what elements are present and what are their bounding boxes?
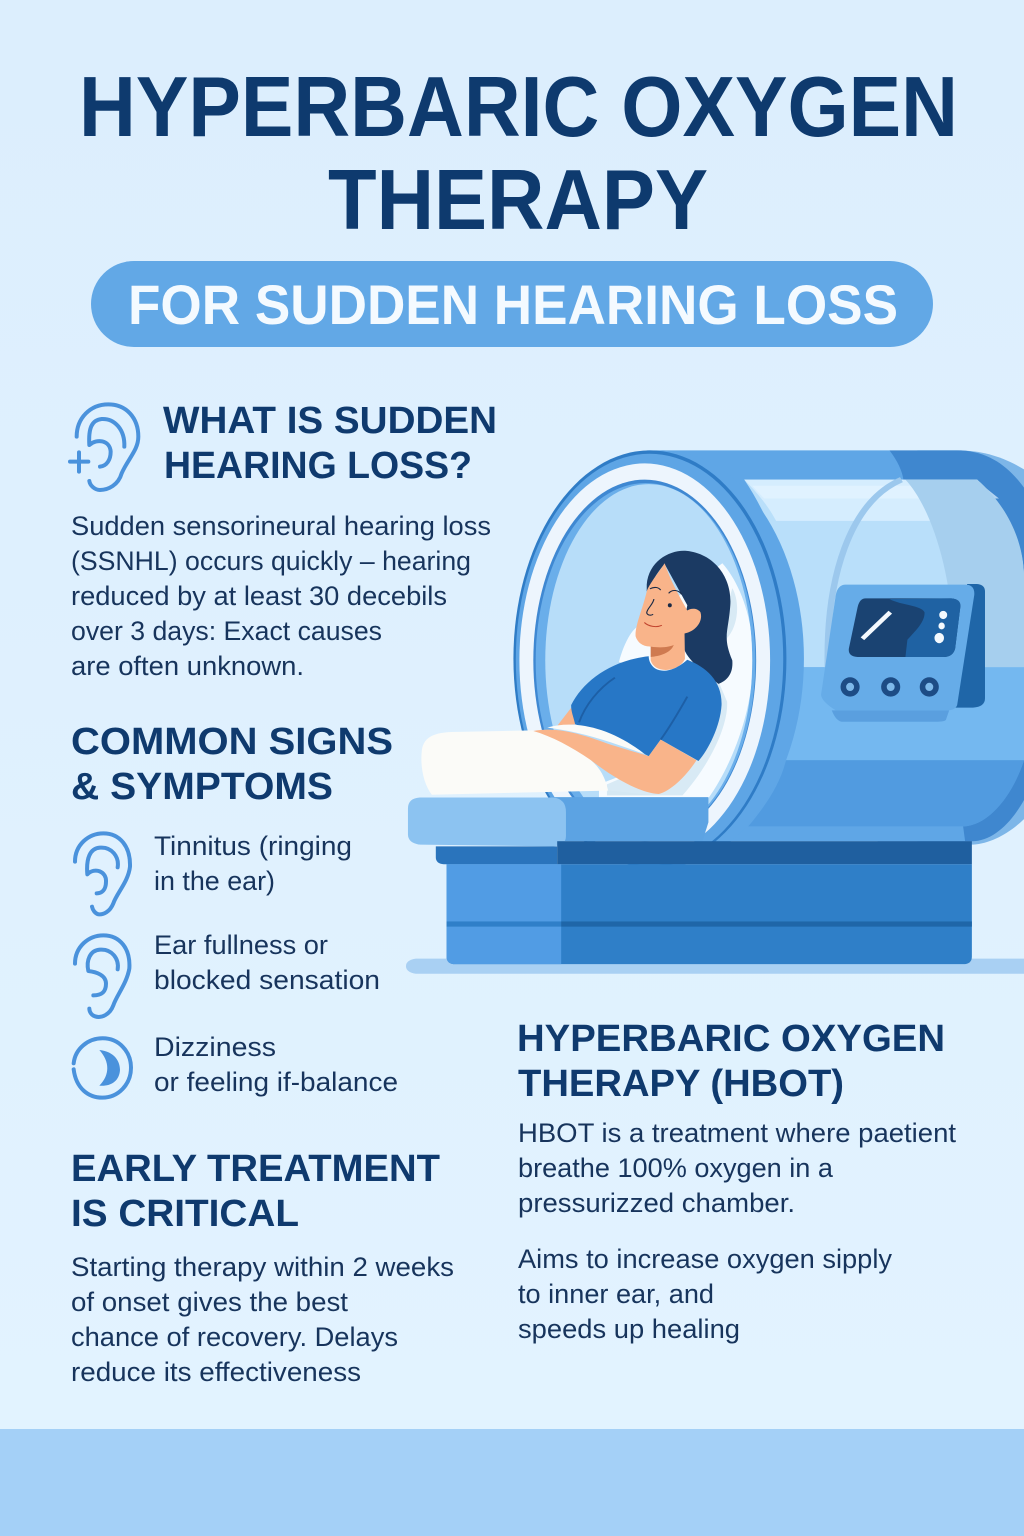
text: dizziness: Dizziness [154,1032,276,1062]
heading: common signs and symptoms: COMMON SIGNS [71,721,393,763]
text: definition: (SSNHL) occurs quickly – hearing [71,546,471,576]
control panel [821,584,985,722]
text: hbot description: pressurizzed chamber. [518,1188,795,1218]
heading: what is sudden hearing loss: WHAT IS SUDDEN [163,400,497,442]
heading: common signs and symptoms: & SYMPTOMS [71,766,333,808]
pillow [599,563,753,798]
heading: common signs and symptoms [71,721,393,808]
text: hbot description [518,1118,956,1218]
chamber body [647,450,1024,845]
illustration: hyperbaric chamber with patient [406,450,1024,974]
subtitle pill [91,261,933,347]
heading: hbot [517,1018,945,1105]
patient [599,563,753,798]
hair [647,551,732,684]
floor shadow [406,959,1024,974]
text: tinnitus [154,831,352,896]
text: definition [71,511,491,681]
shirt [571,656,722,761]
text: definition: are often unknown. [71,651,304,681]
title: THERAPY [328,153,708,248]
text: early treatment: Starting therapy within 2 weeks [71,1252,454,1282]
text: definition: Sudden sensorineural hearing loss [71,511,491,541]
blanket fold over arm [547,725,645,754]
text: hbot aims: Aims to increase oxygen sipply [518,1244,893,1274]
text: dizziness [154,1032,398,1097]
heading: hbot: THERAPY (HBOT) [518,1063,844,1105]
text: hbot aims: speeds up healing [518,1314,740,1344]
chamber front ring [513,450,804,867]
icon: ear with plus [70,404,138,490]
text: ear fullness: blocked sensation [154,965,380,995]
arm behind [557,708,577,726]
icon: ear tinnitus [75,833,130,914]
heading: what is sudden hearing loss: HEARING LOSS? [164,445,472,487]
text: definition: reduced by at least 30 decebils [71,581,447,611]
text: hbot aims: to inner ear, and [518,1279,714,1309]
face [636,563,701,670]
heading: what is sudden hearing loss [163,400,497,487]
text: dizziness: or feeling if-balance [154,1067,398,1097]
title: HYPERBARIC OXYGEN [79,60,958,155]
text: early treatment: chance of recovery. Delays [71,1322,398,1352]
text: tinnitus: in the ear) [154,866,275,896]
text: ear fullness [154,930,380,995]
text: early treatment [71,1252,454,1387]
icon: ear fullness [75,935,129,1017]
footer band [0,1429,1024,1536]
text: early treatment: of onset gives the best [71,1287,349,1317]
subtitle pill: FOR SUDDEN HEARING LOSS [128,273,898,336]
heading: early treatment: EARLY TREATMENT [71,1148,440,1190]
heading: hbot: HYPERBARIC OXYGEN [517,1018,945,1060]
text: early treatment: reduce its effectiveness [71,1357,361,1387]
text: hbot description: HBOT is a treatment where paetient [518,1118,956,1148]
text: definition: over 3 days: Exact causes [71,616,382,646]
text: ear fullness: Ear fullness or [154,930,328,960]
text: tinnitus: Tinnitus (ringing [154,831,352,861]
text: hbot description: breathe 100% oxygen in a [518,1153,834,1183]
text: hbot aims [518,1244,893,1344]
bed [408,797,708,846]
heading: early treatment [71,1148,440,1235]
title [79,60,958,248]
heading: early treatment: IS CRITICAL [71,1193,299,1235]
blanket [422,730,608,795]
base [436,841,972,964]
forearm [533,730,696,794]
icon: dizziness crescent [74,1038,131,1098]
